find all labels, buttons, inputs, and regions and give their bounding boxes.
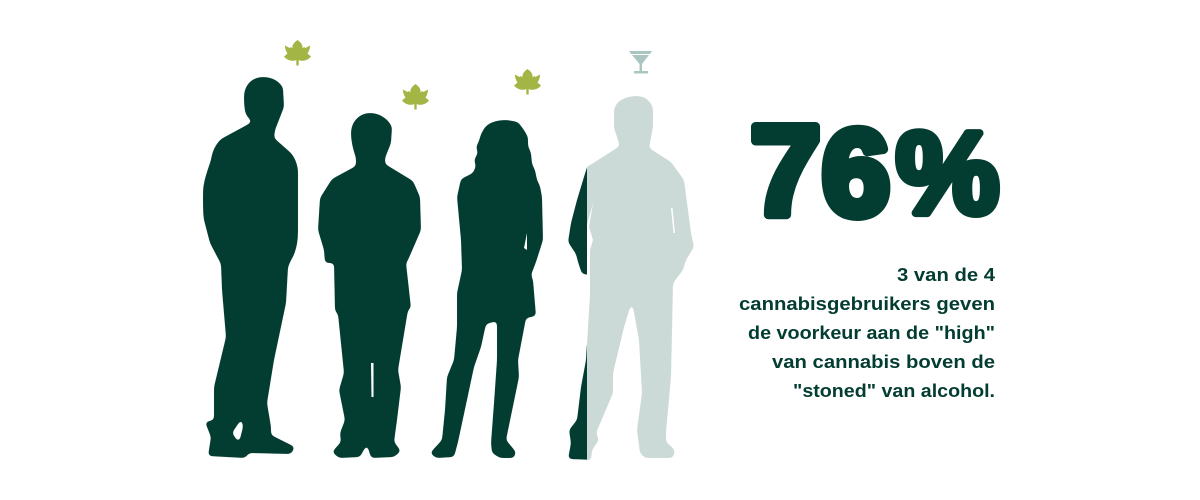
silhouette: man 2 [318,113,421,458]
infographic canvas [202,40,1000,460]
gap at hand of woman [524,233,527,250]
icon: cannabis leaf above person 2 [402,84,429,110]
big number 76%: 6 [822,105,890,241]
big number 76%: 7 [750,100,821,243]
icon: martini glass [629,51,652,74]
silhouette: man 1 [203,77,298,458]
description text: de voorkeur aan de "high" [748,322,995,343]
gap between left arm and torso of man 4 [587,203,593,344]
description text: cannabisgebruikers geven [739,293,995,314]
description text [739,264,996,401]
icon: cannabis leaf above person 1 [284,40,311,66]
gap between legs of man 2 [371,363,374,397]
big number 76% [750,100,999,243]
silhouette: man 4, split dark and light [568,90,694,462]
description text: "stoned" van alcohol. [793,380,995,401]
big number 76%: % [896,108,999,238]
description text: 3 van de 4 [897,264,996,285]
silhouette: woman [430,120,543,458]
icon: cannabis leaf above person 3 [514,69,541,94]
gap between right arm and torso of man 4 [671,208,675,233]
description text: van cannabis boven de [772,351,995,372]
